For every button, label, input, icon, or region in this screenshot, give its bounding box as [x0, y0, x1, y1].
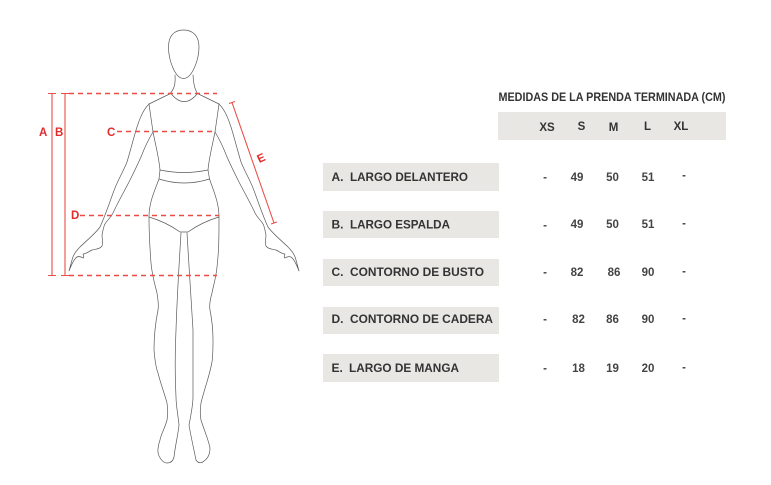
row A: LARGO DELANTERO — [350, 170, 468, 184]
letter A: A — [39, 127, 47, 139]
line C — [117, 130, 215, 132]
row C: 90 — [642, 267, 654, 279]
row B: - — [682, 218, 686, 230]
row A: 50 — [606, 172, 619, 184]
row E: - — [543, 363, 547, 375]
row D: 86 — [606, 314, 619, 326]
line D — [80, 214, 219, 216]
line B — [61, 94, 69, 276]
row B: LARGO ESPALDA — [350, 218, 450, 232]
row C: 82 — [571, 267, 583, 279]
row D: 90 — [642, 314, 654, 326]
size header bar: XL — [674, 121, 688, 133]
neck and neckline — [170, 75, 198, 102]
right leg — [187, 217, 219, 463]
row A: - — [682, 170, 686, 182]
right arm and hand — [215, 104, 299, 271]
row C: 86 — [608, 267, 620, 279]
row E — [323, 354, 686, 382]
left arm and hand — [69, 104, 153, 271]
row C: - — [543, 267, 547, 279]
row C — [323, 259, 686, 286]
row A: 49 — [571, 172, 583, 184]
row A: A. — [332, 170, 344, 184]
row B: 51 — [642, 219, 655, 231]
line A — [48, 94, 56, 276]
row D: D. — [332, 312, 344, 326]
row D: 82 — [572, 314, 585, 326]
row B: 50 — [606, 219, 619, 231]
row C: - — [682, 266, 686, 278]
row D — [323, 307, 686, 334]
size header bar: L — [644, 121, 651, 133]
size header bar: XS — [539, 122, 555, 134]
row D: CONTORNO DE CADERA — [350, 312, 493, 326]
left leg — [149, 217, 181, 463]
shoulders and torso — [149, 94, 219, 170]
size header bar: S — [578, 121, 586, 133]
letter D: D — [71, 210, 79, 222]
waistband — [159, 170, 210, 183]
head — [168, 30, 199, 78]
row E: 20 — [642, 363, 654, 375]
row A — [323, 163, 686, 191]
line E — [229, 102, 277, 224]
top and bottom dashed guides — [69, 94, 217, 276]
measurement lines — [48, 94, 277, 276]
body figure outline — [69, 30, 299, 463]
row D: - — [682, 313, 686, 325]
row B — [323, 211, 686, 238]
row D: - — [543, 314, 547, 326]
table title: MEDIDAS DE LA PRENDA TERMINADA (CM) — [498, 92, 726, 104]
row B: 49 — [571, 219, 583, 231]
row E: LARGO DE MANGA — [349, 361, 459, 375]
letter E: E — [256, 152, 268, 166]
letter B: B — [55, 127, 63, 139]
row E: 19 — [606, 363, 619, 375]
row E: 18 — [572, 363, 585, 375]
measurement letters — [39, 127, 268, 222]
hips and briefs — [149, 179, 219, 232]
letter C: C — [107, 127, 115, 139]
row B: B. — [332, 218, 344, 232]
row C: C. — [332, 265, 344, 279]
size header bar — [498, 112, 726, 140]
row E: E. — [332, 361, 343, 375]
row A: 51 — [642, 172, 655, 184]
row A: - — [543, 172, 547, 184]
row E: - — [682, 362, 686, 374]
size header bar: M — [609, 122, 618, 134]
row B: - — [543, 220, 547, 232]
row C: CONTORNO DE BUSTO — [350, 265, 484, 279]
